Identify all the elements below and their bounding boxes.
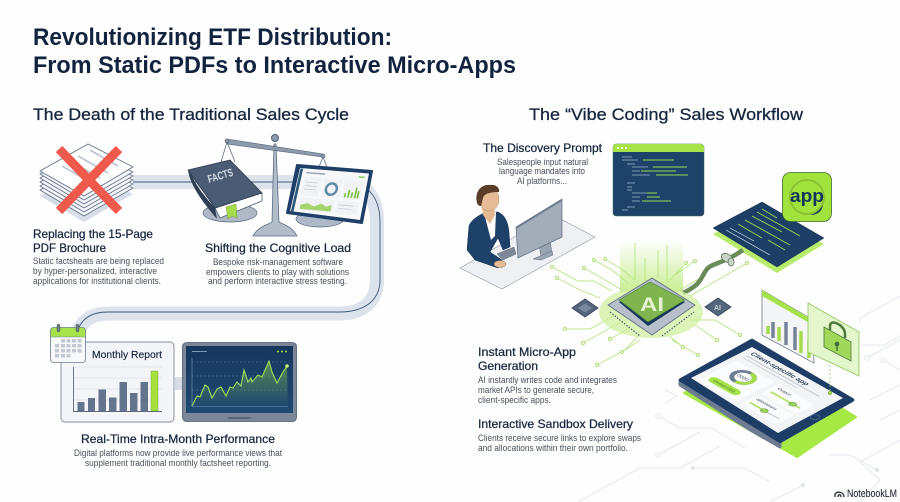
tablet screen contents: Contact-USA xyxy=(712,379,737,393)
small chips xyxy=(572,298,731,317)
client-specific app tablet xyxy=(680,340,856,457)
tablet screen contents: allocations xyxy=(755,398,779,411)
text: replacing the PDF brochure: Static factsheats are being replaced xyxy=(33,256,164,266)
text: shifting the cognitive load: Shifting the Cognitive Load xyxy=(205,241,351,255)
text: interactive sandbox delivery: Interactive Sandbox Delivery xyxy=(478,417,633,431)
book labelled FACTS: FACTS xyxy=(206,167,235,186)
laptop with live chart xyxy=(182,342,296,422)
heading: left section: The Death of the Traditional Sales Cycle xyxy=(33,105,349,124)
panel: the death of the traditional sales cycle xyxy=(33,105,380,468)
text: shifting the cognitive load: and perform interactive stress testing. xyxy=(208,276,347,286)
green circuit traces xyxy=(550,243,748,366)
floating bar chart window xyxy=(762,290,814,363)
panel: the vibe coding sales workflow xyxy=(460,105,900,502)
icon: balance scale with facts book and tablet xyxy=(188,134,372,236)
text: the discovery prompt: Salespeople input natural xyxy=(497,157,588,167)
text: interactive sandbox delivery xyxy=(478,417,641,453)
title: From Static PDFs to Interactive Micro-Apps xyxy=(33,52,516,79)
text: real-time intra-month performance: supplement traditional monthly factsheet reporting. xyxy=(85,458,271,468)
tablet dashboard xyxy=(287,165,372,223)
tablet screen contents xyxy=(698,352,832,424)
text: interactive sandbox delivery: Clients receive secure links to explore swaps xyxy=(478,433,641,443)
text: shifting the cognitive load xyxy=(205,241,351,286)
cable from AI chip to code panel xyxy=(683,250,743,293)
book labelled FACTS xyxy=(188,160,262,219)
background circuit traces xyxy=(578,296,900,502)
text: instant micro-app generation: Instant Micro-App xyxy=(478,345,576,359)
heading: right section: The “Vibe Coding” Sales Workflow xyxy=(529,105,804,124)
text: replacing the PDF brochure xyxy=(33,227,164,286)
icon: app tile: app xyxy=(790,186,824,206)
text: shifting the cognitive load: Bespoke risk-management software xyxy=(213,257,343,267)
icon: calendar xyxy=(50,324,86,362)
text: real-time intra-month performance xyxy=(74,432,282,468)
text: instant micro-app generation: Generation xyxy=(478,359,538,373)
text: the discovery prompt xyxy=(483,141,603,186)
monthly report card: Monthly Report xyxy=(92,349,162,361)
padlock panel xyxy=(808,303,859,376)
AI chip xyxy=(599,278,703,338)
text: instant micro-app generation: market APIs to generate secure, xyxy=(478,385,594,395)
text: the discovery prompt: language mandates into xyxy=(499,166,585,176)
text: interactive sandbox delivery: and allocations within their own portfolio. xyxy=(478,443,628,453)
title: Revolutionizing ETF Distribution: xyxy=(33,24,392,51)
monthly report card xyxy=(61,342,174,422)
text: real-time intra-month performance: Digital platforms now provide live performance views that xyxy=(74,448,282,458)
text: real-time intra-month performance: Real-Time Intra-Month Performance xyxy=(81,432,275,446)
text: instant micro-app generation: client-specific apps. xyxy=(478,395,551,405)
tablet screen contents: Client-specific app xyxy=(748,352,811,387)
text: replacing the PDF brochure: PDF Brochure xyxy=(33,241,106,255)
icon: crossed-out PDF stack xyxy=(40,144,133,222)
text: replacing the PDF brochure: Replacing the 15-Page xyxy=(33,227,153,241)
connector: report to laptop xyxy=(175,377,182,390)
text: the discovery prompt: AI platforms... xyxy=(517,176,567,186)
scale base and beam xyxy=(203,134,344,236)
winding road connector xyxy=(77,182,380,334)
text: instant micro-app generation xyxy=(478,345,617,405)
text: shifting the cognitive load: empowers clients to play with solutions xyxy=(206,267,349,277)
text: replacing the PDF brochure: by hyper-personalized, interactive xyxy=(33,266,157,276)
icon: app tile xyxy=(782,172,832,222)
AI chip: AI xyxy=(640,295,664,316)
text: instant micro-app generation: AI instantly writes code and integrates xyxy=(478,375,617,385)
small chips: AI xyxy=(714,305,721,312)
title xyxy=(33,24,516,79)
illustration: salesperson at computer xyxy=(460,185,595,289)
tablet screen contents: 0000 xyxy=(735,374,750,382)
text: the discovery prompt: The Discovery Prompt xyxy=(483,141,603,155)
glow above AI chip xyxy=(620,240,683,292)
code window xyxy=(613,144,704,216)
isometric code panel xyxy=(713,202,824,273)
text: replacing the PDF brochure: applications for institutional clients. xyxy=(33,276,161,286)
tablet screen contents: Output xyxy=(776,387,793,397)
